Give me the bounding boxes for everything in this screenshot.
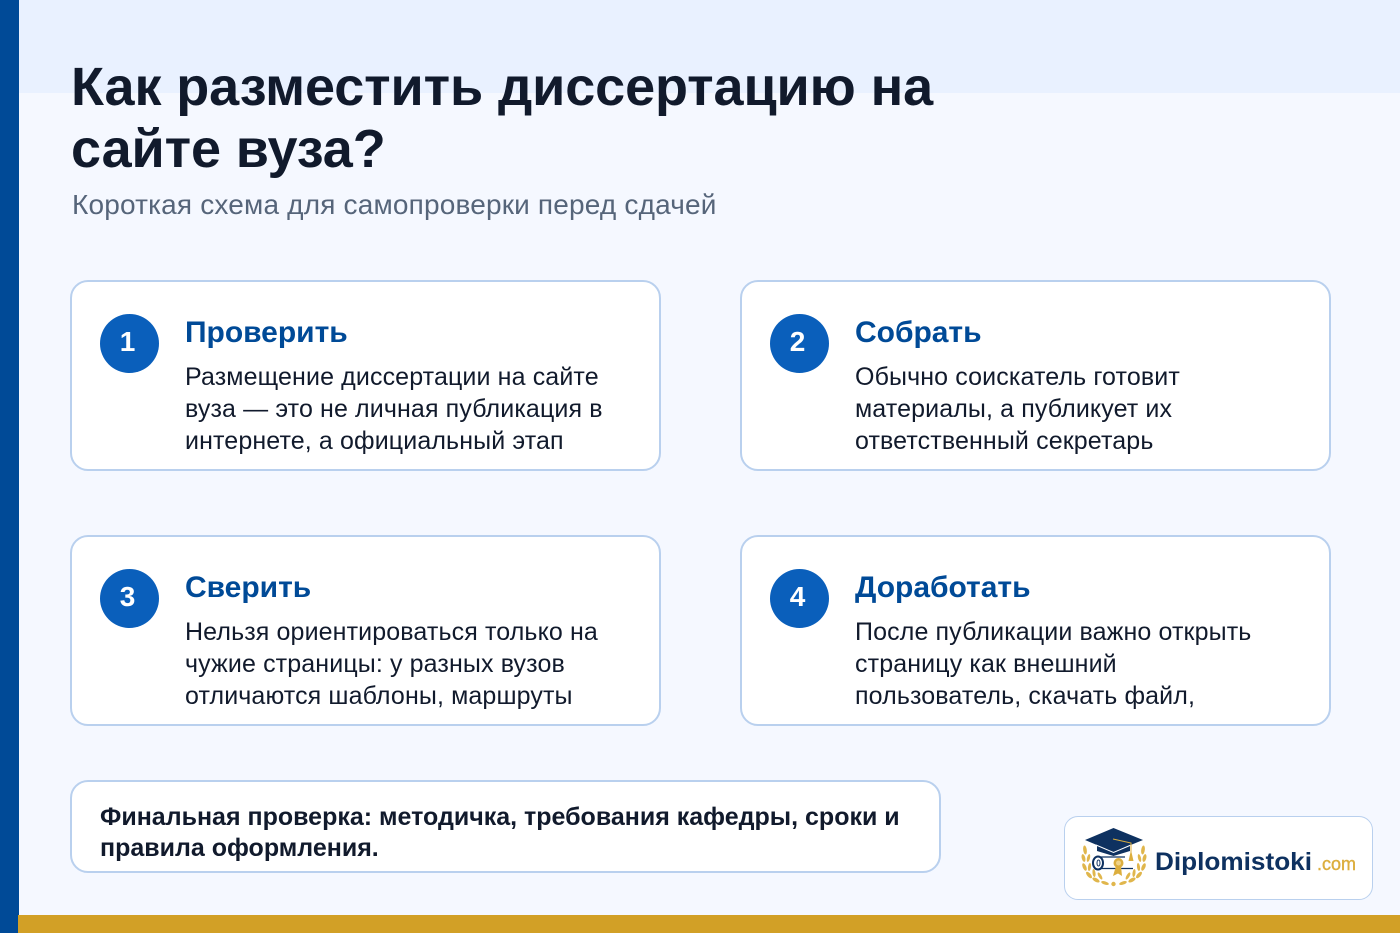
title: сайте вуза? <box>71 119 386 179</box>
title <box>71 57 934 179</box>
panel: step 3 <box>70 535 661 726</box>
panel: step 4 <box>740 535 1331 726</box>
step 1 text: Размещение диссертации на сайте <box>185 363 599 391</box>
left accent bar <box>0 0 19 933</box>
step 2 text: Обычно соискатель готовит <box>855 363 1180 391</box>
step 1 text: вуза — это не личная публикация в <box>185 395 603 423</box>
logo panel <box>1064 816 1373 900</box>
panel: step 1 <box>70 280 661 471</box>
step 1 heading: Проверить <box>185 316 348 349</box>
bottom accent bar <box>18 915 1400 933</box>
step 3 heading: Сверить <box>185 571 311 604</box>
top band <box>0 0 1400 93</box>
step 3 text: Нельзя ориентироваться только на <box>185 618 598 646</box>
step 2 number: 2 <box>790 326 805 357</box>
step 3 text <box>185 618 598 710</box>
step 2 text <box>855 363 1180 455</box>
title: Как разместить диссертацию на <box>71 57 933 117</box>
step 3 text: чужие страницы: у разных вузов <box>185 650 565 678</box>
step 4 heading: Доработать <box>855 571 1030 604</box>
step 4 number <box>770 569 829 628</box>
callout: final check <box>70 780 941 873</box>
step 4 text: страницу как внешний <box>855 650 1117 678</box>
callout text <box>100 803 900 862</box>
logo wordmark: Diplomistoki <box>1155 848 1312 876</box>
callout text: правила оформления. <box>100 834 379 862</box>
subtitle: Короткая схема для самопроверки перед сдачей <box>72 189 717 220</box>
step 1 number <box>100 314 159 373</box>
step 2 text: материалы, а публикует их <box>855 395 1172 423</box>
step 4 text: пользователь, скачать файл, <box>855 682 1195 710</box>
step 1 text <box>185 363 603 455</box>
step 4 text <box>855 618 1251 710</box>
logo icon: graduation cap with laurel <box>1082 828 1146 886</box>
logo wordmark: .com <box>1317 854 1356 874</box>
step 3 number <box>100 569 159 628</box>
panel: step 2 <box>740 280 1331 471</box>
step 3 text: отличаются шаблоны, маршруты <box>185 682 573 710</box>
step 2 heading: Собрать <box>855 316 982 349</box>
callout text: Финальная проверка: методичка, требования кафедры, сроки и <box>100 803 900 831</box>
step 2 number <box>770 314 829 373</box>
step 2 text: ответственный секретарь <box>855 427 1153 455</box>
step 1 number: 1 <box>120 326 135 357</box>
step 4 text: После публикации важно открыть <box>855 618 1251 646</box>
step 3 number: 3 <box>120 581 135 612</box>
step 1 text: интернете, а официальный этап <box>185 427 564 455</box>
step 4 number: 4 <box>790 581 805 612</box>
